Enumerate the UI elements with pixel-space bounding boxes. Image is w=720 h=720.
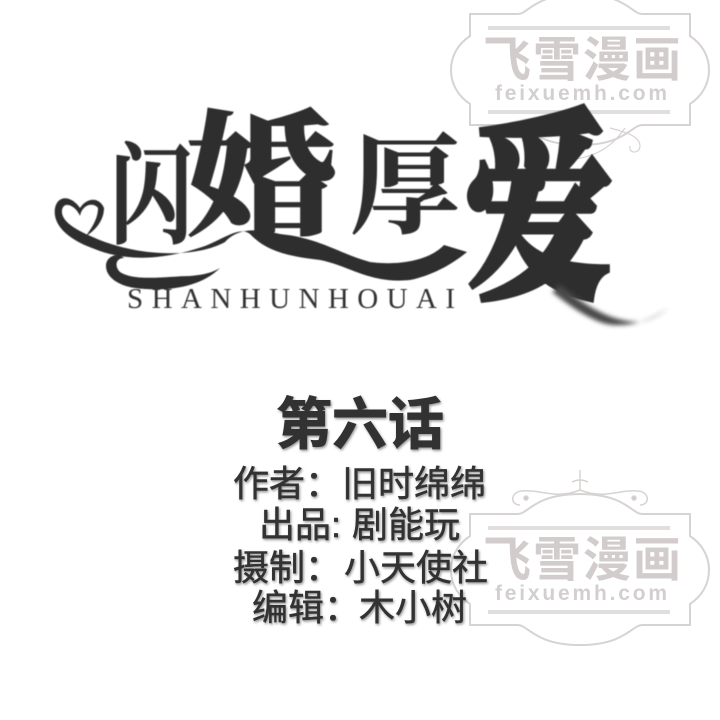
watermark: top (451, 0, 709, 145)
watermark frame (451, 0, 709, 145)
watermark frame (451, 494, 709, 645)
watermark: bottom (451, 470, 709, 645)
credit: production: 小天使社 (344, 547, 488, 588)
logo: 婚: 婚 (186, 104, 336, 253)
logo: brush tail (552, 285, 668, 325)
logo: 爱: 爱 (462, 101, 612, 325)
logo: 厚: 厚 (350, 128, 460, 248)
logo: 闪: 闪 (111, 138, 193, 258)
credit: producer: 剧能玩 (352, 504, 460, 545)
watermark ornament (513, 470, 647, 505)
logo: lower curl (106, 255, 220, 289)
credit: producer: 出品: (259, 504, 341, 545)
credit: editor: 编辑： (252, 587, 360, 628)
watermark url: feixuemh.com (495, 582, 667, 605)
logo (55, 101, 668, 325)
credit: author: 旧时绵绵 (342, 463, 486, 504)
watermark title: 飞雪漫画 (483, 534, 681, 587)
watermark title: 飞雪漫画 (483, 34, 681, 87)
credit: production: 摄制： (233, 547, 341, 588)
logo: latin subtitle: SHANHUNHOUAI (127, 283, 455, 315)
chapter title: 第六话 (276, 393, 444, 456)
logo: heart and swoosh (55, 198, 467, 281)
credit: author: 作者： (233, 463, 341, 504)
top watermark ornament under logo (560, 128, 640, 160)
credits (233, 463, 488, 628)
watermark url: feixuemh.com (495, 82, 667, 105)
credit: editor: 木小树 (359, 587, 467, 628)
